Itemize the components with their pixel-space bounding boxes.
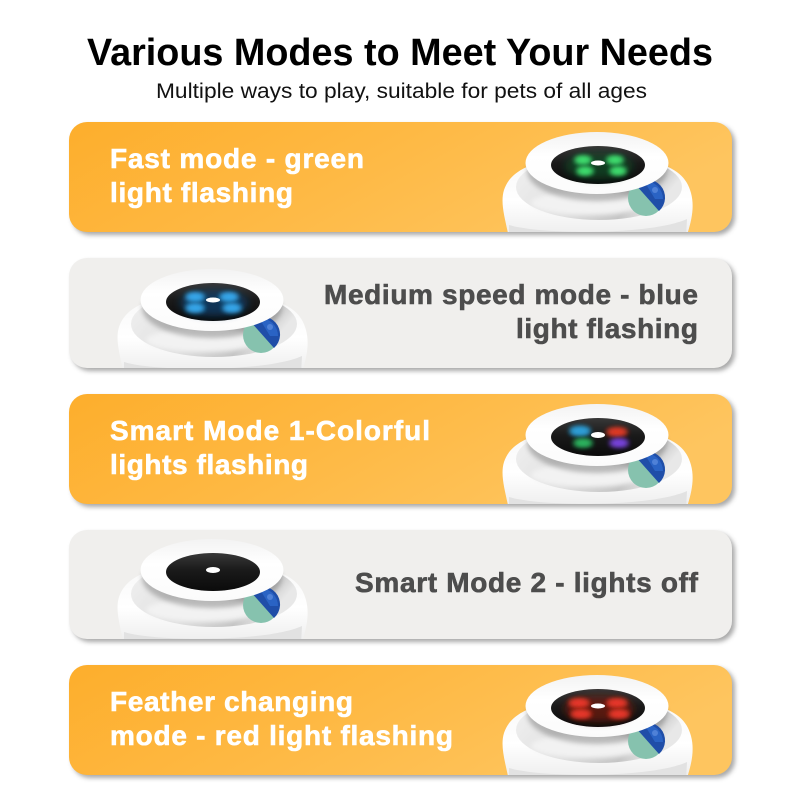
subtitle: Multiple ways to play, suitable for pets of all ages bbox=[156, 80, 647, 103]
title: Various Modes to Meet Your Needs bbox=[87, 32, 713, 74]
text: feather changing mode: Feather changing bbox=[110, 686, 353, 717]
device: lights off bbox=[118, 544, 308, 639]
panel: fast mode bbox=[69, 122, 735, 238]
device: red lights bbox=[503, 675, 693, 781]
text: smart mode 2: Smart Mode 2 - lights off bbox=[355, 567, 699, 598]
device: green lights bbox=[503, 132, 693, 238]
panel: smart mode 2 bbox=[69, 530, 735, 645]
device: colorful lights bbox=[503, 404, 693, 510]
panel: feather changing mode bbox=[69, 665, 735, 781]
text: medium speed mode: light flashing bbox=[516, 313, 698, 344]
panel: medium speed mode bbox=[69, 258, 735, 375]
device: blue lights bbox=[118, 274, 308, 368]
text: smart mode 1: Smart Mode 1-Colorful bbox=[110, 415, 430, 446]
panel: smart mode 1 bbox=[69, 394, 735, 510]
text: smart mode 1: lights flashing bbox=[110, 449, 308, 480]
text: fast mode: light flashing bbox=[110, 177, 293, 208]
text: feather changing mode: mode - red light flashing bbox=[110, 720, 453, 751]
text: medium speed mode: Medium speed mode - blue bbox=[324, 279, 698, 310]
text: fast mode: Fast mode - green bbox=[110, 143, 364, 174]
